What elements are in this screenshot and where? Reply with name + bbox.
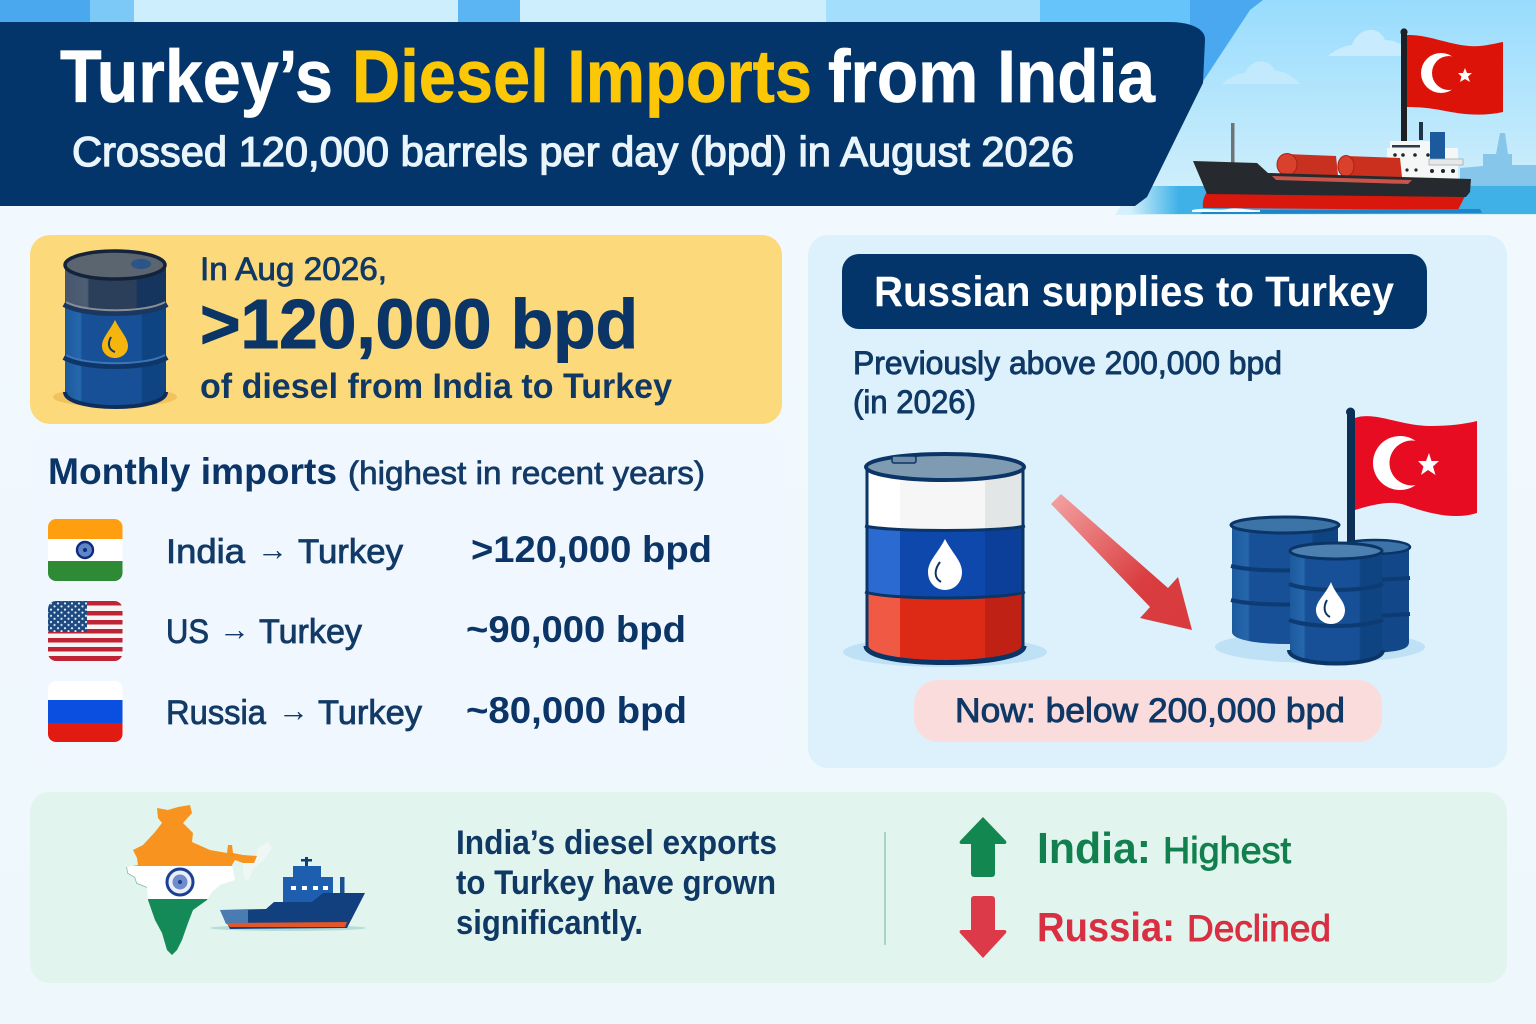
icon: tanker: [210, 857, 366, 931]
icon: Turkish flag and small barrels: [1215, 408, 1477, 664]
panel: monthly imports: [48, 457, 710, 742]
arrow: down: [960, 896, 1006, 958]
US row: [166, 611, 362, 651]
summary text: [456, 824, 777, 942]
pole: [1347, 412, 1355, 547]
panel heading: Russian supplies to Turkey: [874, 268, 1394, 316]
India row: Turkey: [298, 533, 403, 571]
skyline: [1460, 133, 1536, 186]
India row: India: [166, 533, 245, 571]
panel: monthly imports: (highest in recent years): [348, 455, 705, 491]
US row: →: [219, 611, 250, 647]
Russia result: Declined: [1187, 908, 1331, 949]
previous level text: (in 2026): [853, 384, 976, 420]
title: [60, 35, 1156, 118]
panel: headline stat: of diesel from India to Turkey: [200, 367, 673, 406]
icon: India map: [120, 800, 272, 959]
Russia result: Russia:: [1037, 904, 1175, 950]
Russia value: ~80,000 bpd: [466, 690, 687, 731]
flag: [1355, 416, 1477, 516]
panel heading: [842, 254, 1427, 329]
heading: Monthly imports: [48, 451, 337, 492]
barrel back right: [1340, 548, 1409, 653]
current level pill: [914, 680, 1382, 742]
India row: →: [257, 531, 288, 567]
Russia result: [1037, 904, 1331, 950]
icon: Russian flag barrel: [843, 454, 1047, 667]
barrel back left: [1232, 525, 1338, 644]
arrow: decline: [1051, 494, 1192, 630]
current level pill: Now: below 200,000 bpd: [955, 692, 1345, 730]
summary text: to Turkey have grown: [456, 864, 776, 902]
hull red: [1203, 190, 1468, 210]
title banner: [0, 22, 1205, 206]
barrel front: [1290, 552, 1382, 664]
Russia row: [166, 692, 422, 732]
previous level text: Previously above 200,000 bpd: [853, 345, 1282, 381]
cloud right: [1328, 30, 1402, 56]
icon: India flag: [48, 519, 123, 581]
header sky strip: [0, 0, 1536, 90]
icon: Russia flag: [48, 681, 123, 742]
panel: headline stat: >120,000 bpd: [200, 285, 638, 363]
header scene: sky, clouds, sea, ship and Turkish flag: [1115, 0, 1536, 215]
panel: Russian supplies: [808, 235, 1507, 768]
summary text: India’s diesel exports: [456, 824, 777, 862]
summary text: significantly.: [456, 904, 643, 942]
India result: India:: [1037, 824, 1151, 873]
icon: oil barrel: [53, 251, 177, 407]
flag: [1407, 35, 1503, 115]
icon: US flag: [48, 601, 123, 661]
hull black: [1193, 161, 1471, 197]
arrow: up: [960, 817, 1006, 877]
panel: export summary: [30, 792, 1507, 983]
Russia row: Russia: [166, 694, 266, 732]
title: Turkey’s: [60, 35, 333, 118]
US row: Turkey: [259, 613, 362, 651]
superstructure: [1387, 148, 1458, 179]
US row: US: [166, 613, 209, 651]
Russia row: Turkey: [318, 694, 422, 732]
India row: [166, 531, 403, 571]
cargo tanks: [1279, 154, 1338, 175]
stat text: In Aug 2026,: [200, 251, 387, 287]
title: Diesel Imports: [352, 35, 812, 118]
US value: ~90,000 bpd: [466, 609, 686, 650]
India result: [1037, 824, 1292, 873]
waterline: [1200, 209, 1482, 214]
Russia row: →: [278, 692, 309, 728]
subtitle: Crossed 120,000 barrels per day (bpd) in August 2026: [72, 128, 1074, 175]
mast: [1231, 123, 1234, 163]
India value: >120,000 bpd: [471, 529, 712, 570]
title: from India: [828, 35, 1156, 118]
sea: [1130, 186, 1536, 214]
India result: Highest: [1163, 830, 1292, 871]
cloud left: [1222, 61, 1301, 84]
flag pole: [1401, 32, 1407, 142]
panel: headline stat: [30, 235, 782, 424]
previous level text: [853, 345, 1282, 420]
